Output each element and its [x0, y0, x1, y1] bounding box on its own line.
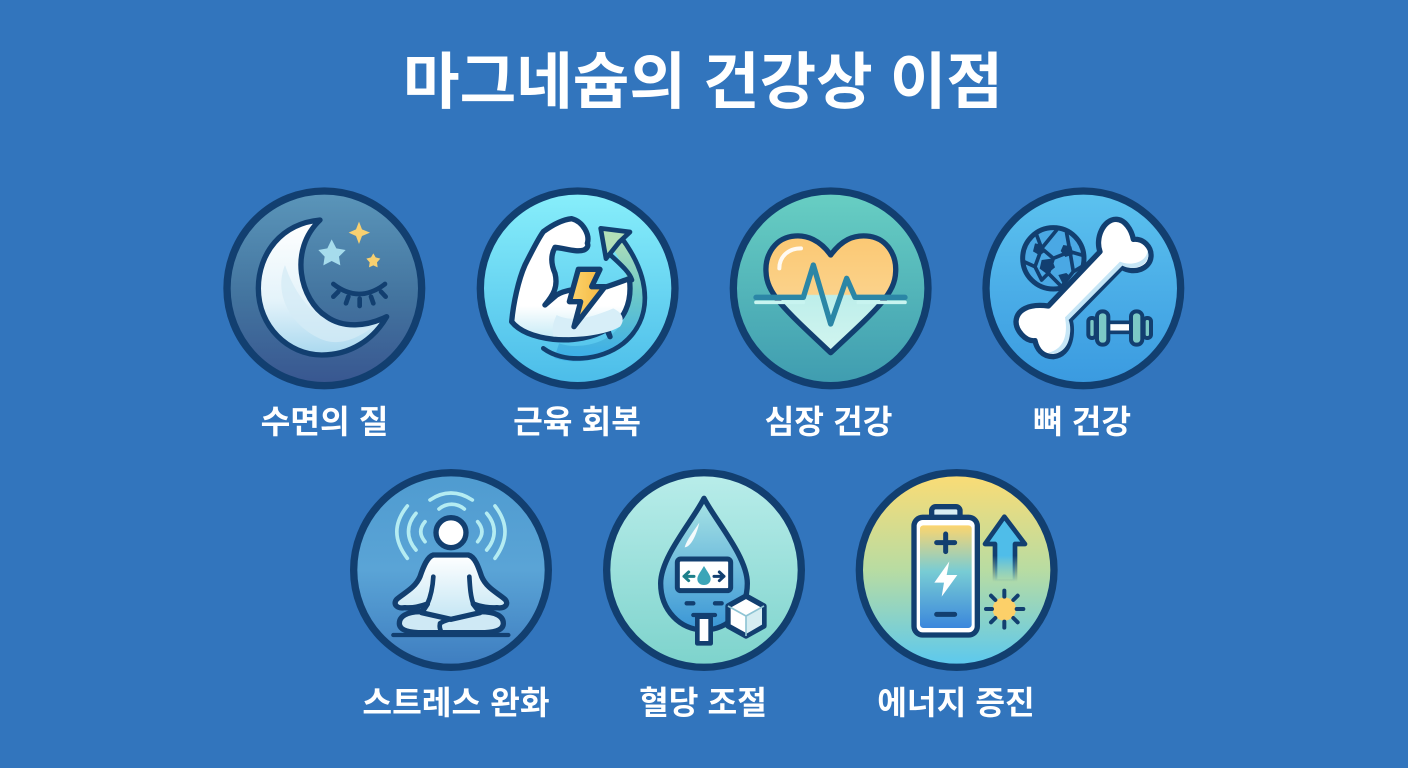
panel: energy boost: [859, 473, 1054, 721]
icon: meditating person with calm waves: [354, 473, 548, 667]
panel: bone health: [986, 191, 1181, 440]
icon: blood drop glucose meter and sugar cube: [607, 473, 801, 667]
panel: heart health: [733, 191, 928, 440]
label: bone health: 뼈 건강: [1033, 404, 1131, 440]
title: 마그네슘의 건강상 이점: [403, 48, 1003, 117]
dumbbell: [1088, 311, 1151, 345]
label: muscle recovery: 근육 회복: [513, 404, 641, 440]
panel: blood sugar control: [607, 473, 801, 721]
label: energy boost: 에너지 증진: [877, 685, 1035, 721]
label: blood sugar control: 혈당 조절: [639, 685, 767, 721]
panel: stress relief: [354, 473, 550, 721]
label: sleep quality: 수면의 질: [261, 404, 388, 440]
panel: sleep quality: [227, 191, 422, 440]
icon: bone, mineral sphere and dumbbell: [986, 191, 1181, 386]
icon: moon and stars: [227, 191, 422, 386]
crossed legs: [399, 612, 503, 633]
icon: heart with pulse line: [733, 191, 928, 386]
label: stress relief: 스트레스 완화: [362, 685, 550, 721]
mineral sphere: [1023, 228, 1084, 289]
bone: [1016, 219, 1151, 357]
icon: flexed arm with lightning bolt: [480, 191, 675, 386]
icon: battery, up arrow and sun: [859, 473, 1054, 667]
panel: muscle recovery: [480, 191, 675, 440]
torso and arms: [395, 555, 507, 619]
label: heart health: 심장 건강: [765, 404, 892, 440]
